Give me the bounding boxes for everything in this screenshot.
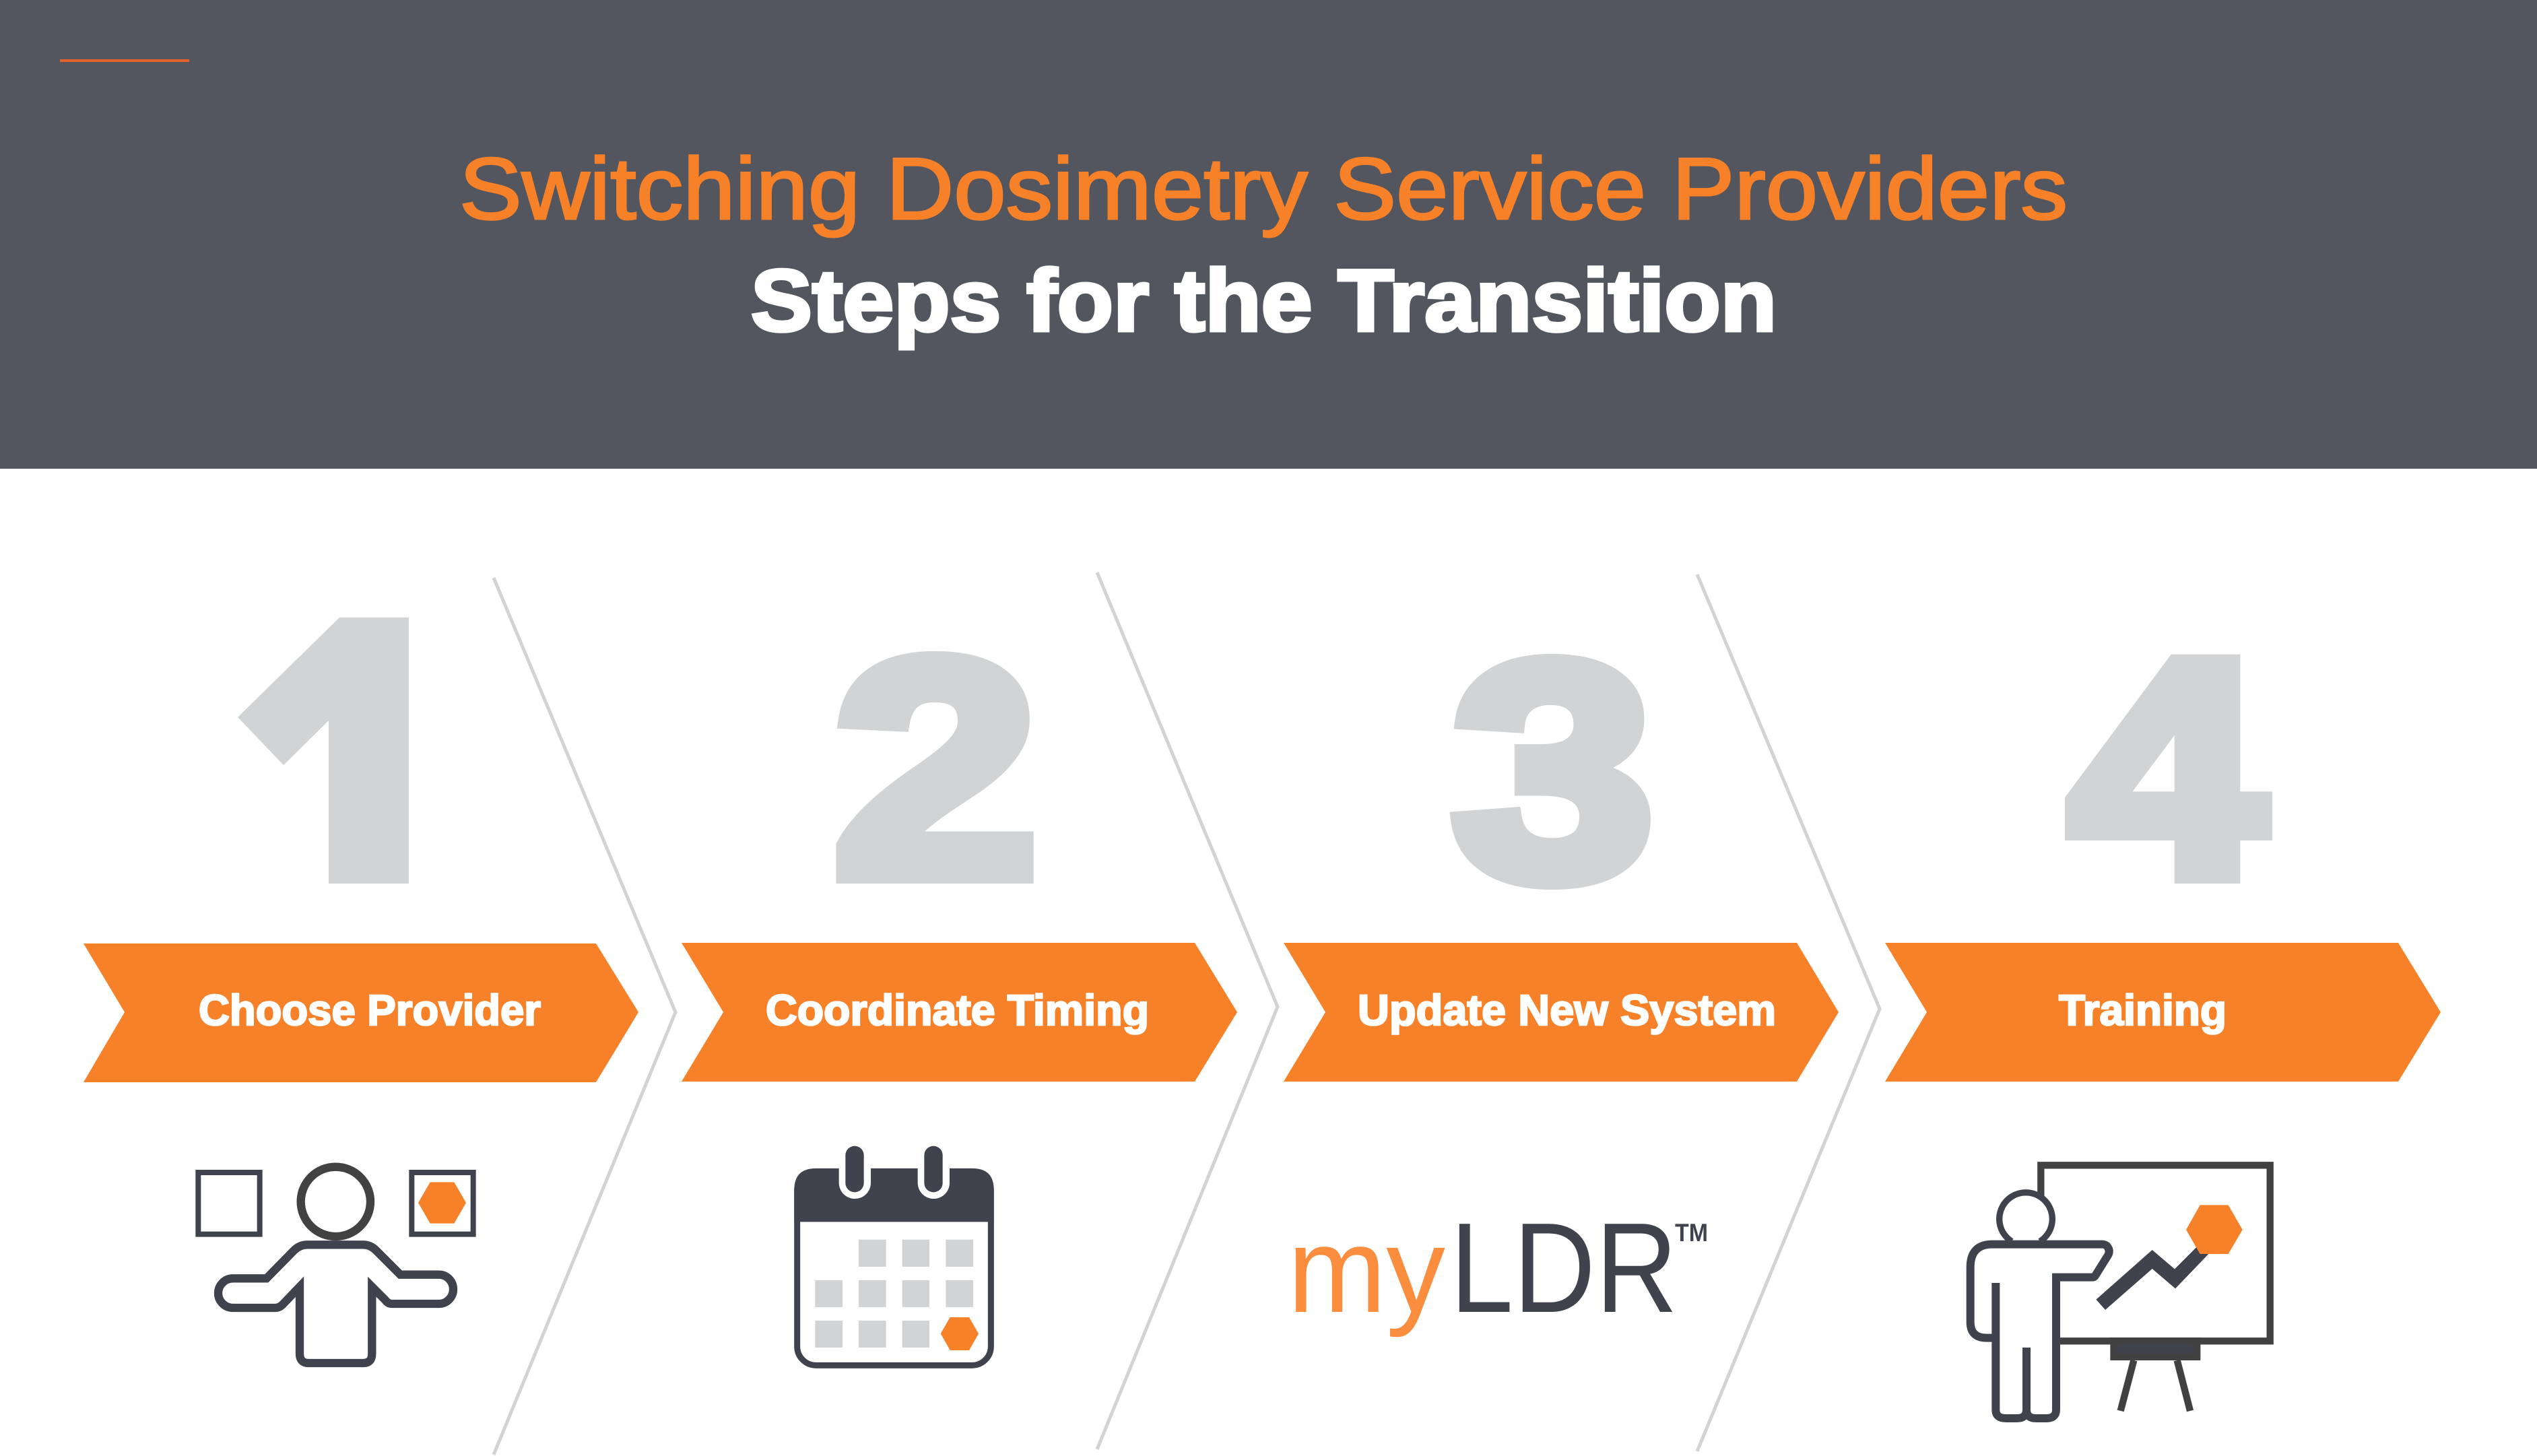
step 2 banner (682, 943, 1237, 1082)
title: Switching Dosimetry Service Providers (459, 139, 2068, 238)
icon: presenter at chart board (1971, 1165, 2270, 1418)
step 3 banner: Update New System (1358, 986, 1776, 1034)
step 2 banner: Coordinate Timing (766, 986, 1149, 1034)
title: Steps for the Transition (751, 251, 1777, 350)
logo: myLDR: my (1288, 1203, 1445, 1338)
step numbers: 4 (2070, 596, 2266, 940)
step 1 banner (84, 944, 638, 1082)
title (459, 139, 2068, 350)
step numbers: 1 (57, 547, 556, 956)
step 1 banner: Choose Provider (199, 986, 541, 1034)
logo: myLDR: TM (1675, 1219, 1708, 1247)
logo: myLDR (1288, 1197, 1708, 1339)
step numbers (57, 547, 2266, 956)
step 4 banner (1885, 943, 2441, 1082)
header band (0, 0, 2537, 469)
step numbers: 3 (1453, 599, 1653, 943)
step 3 banner (1284, 943, 1839, 1082)
step numbers: 2 (834, 596, 1038, 940)
icon: person choosing between two options (198, 1167, 473, 1363)
step 4 banner: Training (2059, 986, 2227, 1034)
logo: myLDR: LDR (1450, 1197, 1678, 1339)
divider arrows (494, 572, 1880, 1455)
icon: calendar (794, 1146, 994, 1365)
